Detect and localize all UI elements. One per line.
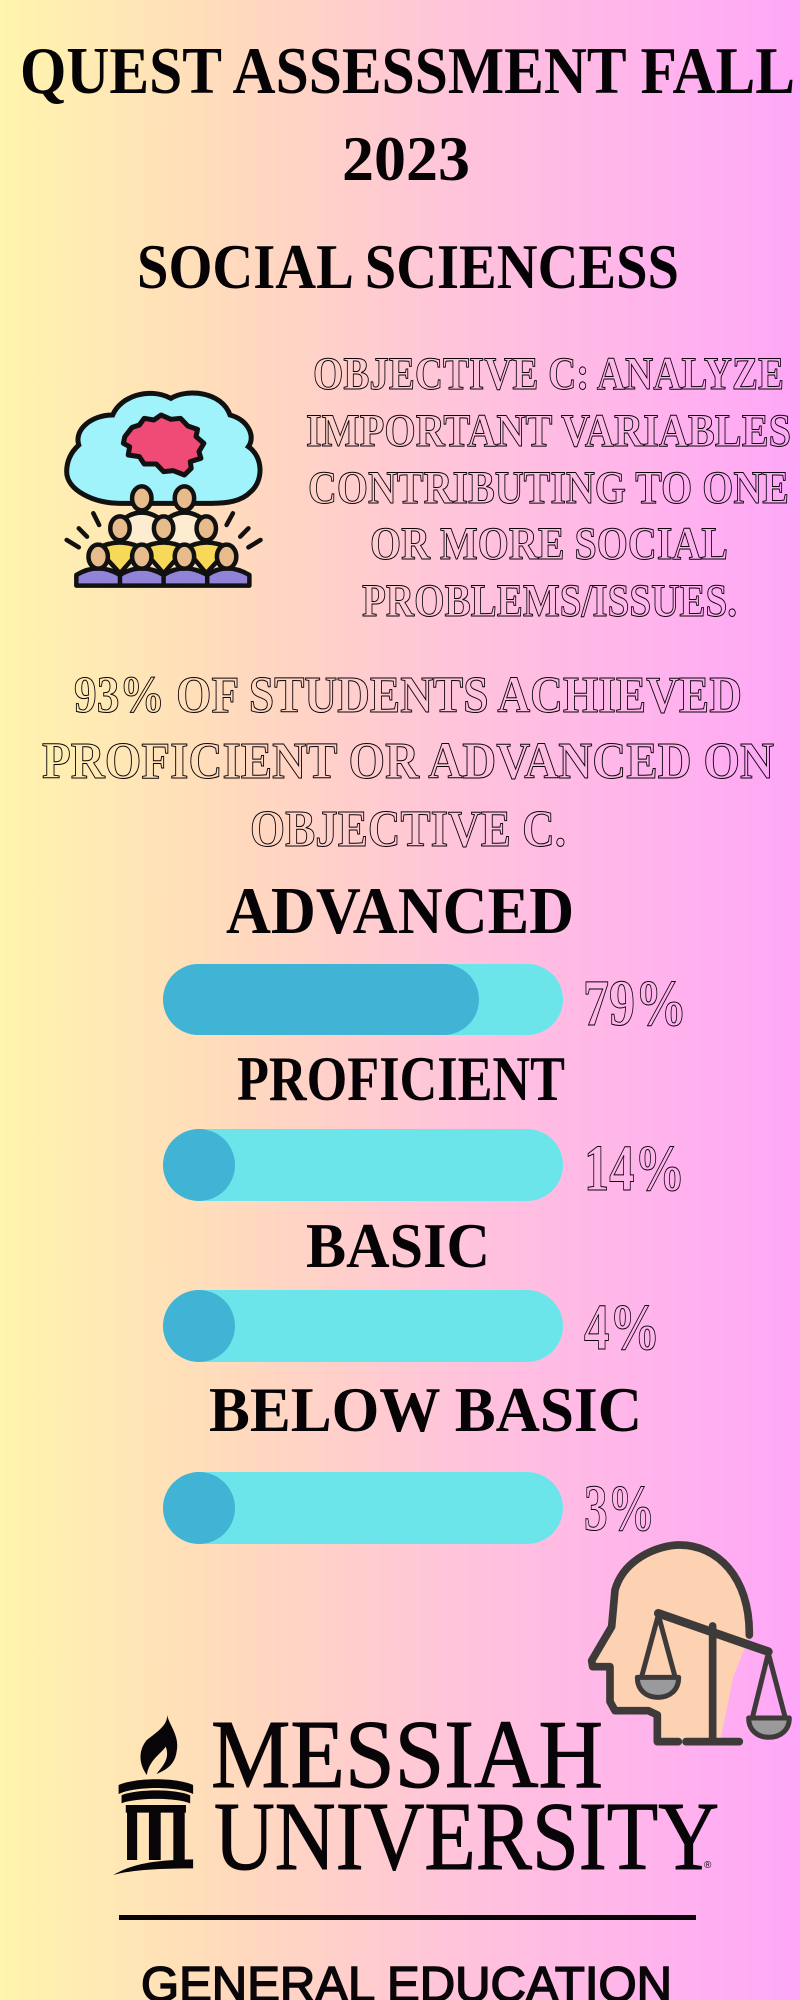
- panel: below basic result: [163, 1374, 655, 1545]
- value: 79%: 79%: [583, 967, 687, 1040]
- summary statement: OBJECTIVE C.: [250, 801, 566, 858]
- progress bar: 4%: [163, 1290, 563, 1362]
- heading: proficient: PROFICIENT: [237, 1043, 565, 1114]
- registered mark: ®: [704, 1860, 712, 1871]
- progress bar: 3%: [163, 1472, 563, 1544]
- heading: basic: BASIC: [306, 1210, 490, 1281]
- summary statement: [42, 667, 774, 858]
- icon: head with balance scales: [592, 1545, 789, 1742]
- wordmark: University: UNIVERSITY: [214, 1783, 719, 1890]
- progress bar: 14%: [163, 1129, 563, 1201]
- heading: below basic: BELOW BASIC: [209, 1374, 642, 1445]
- title: 2023: [342, 123, 470, 194]
- objective text block: PROBLEMS/ISSUES.: [362, 575, 737, 627]
- subtitle: social sciences: SOCIAL SCIENCESS: [137, 231, 679, 302]
- value: 14%: 14%: [584, 1132, 685, 1205]
- panel: advanced result: [163, 874, 687, 1040]
- value: 4%: 4%: [584, 1291, 660, 1364]
- panel: basic result: [163, 1210, 660, 1364]
- value: 3%: 3%: [584, 1472, 655, 1545]
- progress bar: 79%: [163, 964, 563, 1035]
- icon: group of people sharing a brain cloud: [67, 393, 261, 586]
- icon: flame and column emblem: [113, 1715, 193, 1875]
- panel: proficient result: [163, 1043, 685, 1205]
- objective text block: [306, 348, 791, 627]
- objective text block: OR MORE SOCIAL: [370, 518, 728, 570]
- wordmark: Messiah: MESSIAH: [211, 1701, 603, 1809]
- logo: Messiah University: [113, 1701, 719, 1890]
- heading: advanced: ADVANCED: [226, 874, 574, 948]
- title: [20, 34, 795, 194]
